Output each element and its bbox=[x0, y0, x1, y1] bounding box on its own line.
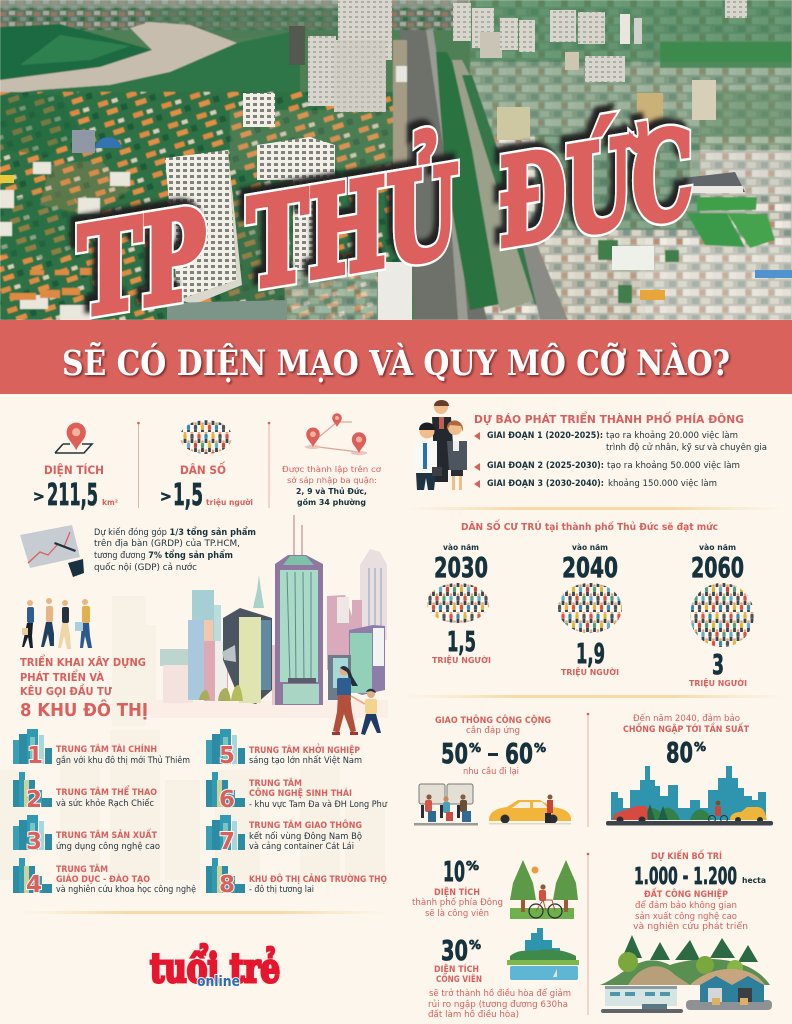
column: 2060: 2060 bbox=[691, 551, 744, 584]
title: TP THỦ ĐỨC: THỦ bbox=[247, 124, 458, 317]
value: 10 percent: 10 bbox=[443, 855, 465, 888]
text: GRDP contribution: Dự kiến đóng góp 1/3 tổng sản phẩm bbox=[94, 526, 256, 538]
district 3: ứng dụng công nghệ cao bbox=[56, 841, 160, 852]
list: three phases: trình độ cử nhân, kỹ sư và chuyên gia bbox=[606, 442, 767, 453]
district 7: TRUNG TÂM GIAO THÔNG bbox=[249, 819, 362, 831]
value: 50-60 percent: % bbox=[469, 741, 481, 755]
heading: flood protection bbox=[623, 713, 749, 735]
district 4: và nghiên cứu khoa học công nghệ bbox=[56, 884, 196, 895]
district 3 bbox=[13, 815, 160, 855]
district 8: KHU ĐÔ THỊ CẢNG TRƯỜNG THỌ bbox=[249, 873, 387, 885]
district 7: và cảng container Cát Lái bbox=[249, 841, 354, 852]
district 1: TRUNG TÂM TÀI CHÍNH bbox=[56, 743, 157, 755]
text: industrial land: để đảm bảo không gian bbox=[635, 900, 737, 911]
district 2: TRUNG TÂM THỂ THAO bbox=[56, 785, 157, 798]
column: 2040: 1,9 bbox=[576, 637, 605, 670]
district 3: 3 bbox=[26, 829, 42, 855]
banner: subtitle bbox=[0, 320, 792, 394]
value: area: km² bbox=[102, 498, 118, 507]
district 6: 6 bbox=[219, 787, 235, 813]
text: retention lake: đất làm hồ điều hòa) bbox=[428, 1009, 519, 1020]
illustration: four walkers bbox=[22, 598, 92, 649]
column: 2060: vào năm bbox=[699, 543, 736, 552]
column: 2060 bbox=[689, 543, 754, 688]
text: GRDP contribution: tương đương 7% tổng sản phẩm bbox=[94, 549, 233, 561]
value: 30 percent: 30 bbox=[441, 934, 468, 967]
column: 2030: 1,5 bbox=[447, 625, 476, 658]
hero photo: aerial view of Thủ Đức bbox=[0, 0, 792, 320]
list: three phases bbox=[474, 430, 767, 489]
icon: map pin bbox=[55, 423, 92, 453]
illustration: trees and cyclist bbox=[510, 860, 578, 919]
text: retention lake bbox=[428, 963, 571, 1020]
illustration: taxi bbox=[489, 794, 571, 824]
district 6: CÔNG NGHỆ SINH THÁI bbox=[249, 787, 352, 799]
column: 2030 bbox=[427, 543, 491, 665]
panel: flood protection bbox=[606, 713, 773, 826]
district 4: TRUNG TÂM bbox=[56, 863, 108, 875]
panel: resident population forecast bbox=[427, 520, 754, 688]
column: 2060: TRIỆU NGƯỜI bbox=[689, 677, 747, 688]
district 4: GIÁO DỤC - ĐÀO TẠO bbox=[56, 873, 150, 885]
panel: public transport bbox=[414, 714, 571, 826]
heading: public transport: GIAO THÔNG CÔNG CỘNG bbox=[435, 714, 551, 726]
district 8: - đô thị tương lai bbox=[249, 884, 314, 895]
district 7 bbox=[206, 815, 362, 855]
district 6 bbox=[206, 772, 388, 813]
panel: area stat bbox=[33, 423, 118, 513]
heading: eight urban areas: KÊU GỌI ĐẦU TƯ bbox=[20, 684, 112, 698]
value: 50-60 percent: 60 bbox=[505, 737, 533, 770]
text: GRDP contribution: quốc nội (GDP) cả nước bbox=[94, 562, 197, 573]
column: 2060: 3 bbox=[712, 648, 724, 681]
heading: planned allocation: DỰ KIẾN BỐ TRÍ bbox=[651, 849, 722, 862]
text: retention lake: rủi ro ngập (tương đương 630ha bbox=[428, 999, 568, 1010]
column: 2040 bbox=[558, 543, 622, 677]
district 4: 4 bbox=[26, 872, 42, 898]
value: 80 percent: % bbox=[694, 740, 706, 754]
logo: Tuổi Trẻ Online: tuổi trẻ bbox=[150, 945, 280, 992]
district 1: 1 bbox=[27, 743, 43, 769]
value: population: 1,5 bbox=[173, 478, 203, 513]
value: population: > bbox=[160, 489, 172, 505]
text: park area: DIỆN TÍCH bbox=[434, 886, 480, 898]
list: three phases: GIAI ĐOẠN 1 (2020-2025): bbox=[487, 431, 603, 441]
text: GRDP contribution: trên địa bàn (GRDP) của TP.HCM, bbox=[94, 538, 240, 549]
icon: three map pins bbox=[305, 413, 367, 455]
district 2: và sức khỏe Rạch Chiếc bbox=[56, 798, 154, 809]
panel: city formation bbox=[282, 413, 381, 507]
value: area bbox=[33, 478, 118, 513]
icon: growth chart with pen bbox=[20, 525, 84, 577]
heading: forecast: DỰ BÁO PHÁT TRIỂN THÀNH PHỐ PHÍA ĐÔNG bbox=[474, 411, 744, 426]
heading: public transport: cần đáp ứng bbox=[466, 725, 520, 736]
text: retention lake: DIỆN TÍCH bbox=[434, 963, 479, 975]
panel: industrial land bbox=[600, 849, 772, 1013]
text: formation: gồm 34 phường bbox=[297, 497, 366, 507]
district 1 bbox=[13, 729, 190, 769]
illustration: three business people bbox=[414, 400, 467, 490]
column: 2040: TRIỆU NGƯỜI bbox=[561, 666, 619, 677]
illustration: lake and skyline bbox=[507, 928, 579, 980]
district 5 bbox=[206, 729, 362, 769]
value: 50-60 percent bbox=[441, 737, 546, 770]
heading: population forecast: DÂN SỐ CƯ TRÚ tại thành phố Thủ Đức sẽ đạt mức bbox=[461, 520, 718, 533]
district 5: TRUNG TÂM KHỞI NGHIỆP bbox=[249, 743, 360, 756]
value: 50-60 percent: 50 bbox=[441, 737, 468, 770]
column: 2030: 2030 bbox=[434, 551, 488, 584]
text: formation: Được thành lập trên cơ bbox=[282, 464, 381, 475]
panel: population stat bbox=[160, 420, 253, 513]
logo: Tuổi Trẻ Online: online bbox=[197, 974, 240, 990]
heading: population: DÂN SỐ bbox=[180, 460, 226, 477]
title: TP THỦ ĐỨC: THỦ bbox=[247, 124, 458, 317]
value: 10 percent: % bbox=[466, 859, 479, 873]
text: formation bbox=[282, 464, 381, 507]
illustration: bus passengers bbox=[414, 784, 478, 826]
illustration: flood-safe skyline bbox=[606, 766, 773, 826]
value: 1000-1200 hectares: hecta bbox=[742, 876, 766, 885]
value: population bbox=[160, 478, 253, 513]
district 7: kết nối vùng Đông Nam Bộ bbox=[249, 831, 362, 842]
district 2: 2 bbox=[26, 787, 42, 813]
illustration: landscape with factories bbox=[600, 935, 772, 1013]
district 8: 8 bbox=[219, 872, 235, 898]
district 5: sáng tạo lớn nhất Việt Nam bbox=[249, 755, 362, 766]
heading: public transport bbox=[435, 714, 551, 736]
text: park area: thành phố phía Đông bbox=[412, 897, 503, 908]
list: three phases: khoảng 150.000 việc làm bbox=[608, 478, 717, 489]
value: 50-60 percent: % bbox=[534, 741, 546, 755]
value: area: 211,5 bbox=[47, 478, 98, 513]
heading: eight urban areas: 8 KHU ĐÔ THỊ bbox=[20, 699, 148, 721]
district 7: 7 bbox=[219, 829, 235, 855]
text: GRDP contribution bbox=[94, 526, 256, 573]
heading: eight urban areas: TRIỂN KHAI XÂY DỰNG bbox=[20, 654, 146, 669]
district 4 bbox=[13, 858, 196, 898]
illustration: mother and child walking bbox=[332, 666, 381, 735]
heading: flood protection: CHỐNG NGẬP TỚI TẦN SUẤT bbox=[623, 722, 749, 735]
district 6: TRUNG TÂM bbox=[249, 777, 302, 789]
text: industrial land: và nghiên cứu phát triển bbox=[633, 921, 748, 932]
text: formation: 2, 9 và Thủ Đức, bbox=[296, 486, 367, 496]
panel: eastern city forecast bbox=[414, 400, 767, 490]
heading: flood protection: Đến năm 2040, đảm bảo bbox=[633, 713, 740, 724]
district 5: 5 bbox=[219, 743, 235, 769]
text: park area bbox=[412, 886, 503, 919]
text: industrial land: ĐẤT CÔNG NGHIỆP bbox=[644, 887, 728, 900]
illustration: city skyline bbox=[150, 515, 388, 718]
value: 30 percent: % bbox=[469, 938, 481, 952]
district 2 bbox=[13, 772, 157, 813]
value: area: > bbox=[33, 489, 45, 505]
text: industrial land: sản xuất công nghệ cao bbox=[635, 911, 737, 922]
list: three phases: tạo ra khoảng 50.000 việc làm bbox=[607, 460, 740, 471]
faint background skyline behind the eight districts bbox=[0, 596, 385, 880]
column: 2040: 2040 bbox=[562, 551, 618, 584]
column: 2030: TRIỆU NGƯỜI bbox=[432, 654, 491, 665]
text: retention lake: sẽ trở thành hồ điều hòa để giảm bbox=[429, 988, 571, 999]
list: three phases: tạo ra khoảng 20.000 việc làm bbox=[606, 430, 738, 441]
heading: eight urban areas: PHÁT TRIỂN VÀ bbox=[20, 669, 105, 684]
district 8 bbox=[206, 858, 387, 898]
text: retention lake: CÔNG VIÊN bbox=[436, 973, 482, 985]
text: park area: sẽ là công viên bbox=[425, 908, 489, 919]
title: TP THỦ ĐỨC bbox=[78, 102, 693, 345]
district 3: TRUNG TÂM SẢN XUẤT bbox=[56, 828, 157, 841]
heading: eight urban areas bbox=[20, 654, 148, 721]
text: formation: sở sáp nhập ba quận: bbox=[287, 475, 377, 486]
district 1: gần với khu đô thị mới Thủ Thiêm bbox=[56, 755, 190, 766]
list: three phases: GIAI ĐOẠN 2 (2025-2030): bbox=[487, 461, 604, 471]
list: three phases: GIAI ĐOẠN 3 (2030-2040): bbox=[487, 479, 604, 489]
district 6: - khu vực Tam Đa và ĐH Long Phư bbox=[249, 800, 388, 810]
towers bbox=[338, 0, 392, 60]
column: 2030: vào năm bbox=[443, 543, 479, 552]
value: population: triệu người bbox=[206, 498, 253, 507]
text: travel demand: nhu cầu đi lại bbox=[463, 766, 519, 777]
panel: parks bbox=[412, 855, 579, 1020]
heading: area: DIỆN TÍCH bbox=[44, 462, 104, 477]
column: 2040: vào năm bbox=[572, 543, 608, 552]
title: TP THỦ ĐỨC: TP bbox=[78, 181, 206, 345]
text: industrial land bbox=[633, 887, 748, 932]
value: 80 percent: 80 bbox=[666, 736, 693, 769]
title: TP THỦ ĐỨC: TP bbox=[78, 181, 206, 345]
icon: crowd bbox=[180, 420, 232, 454]
